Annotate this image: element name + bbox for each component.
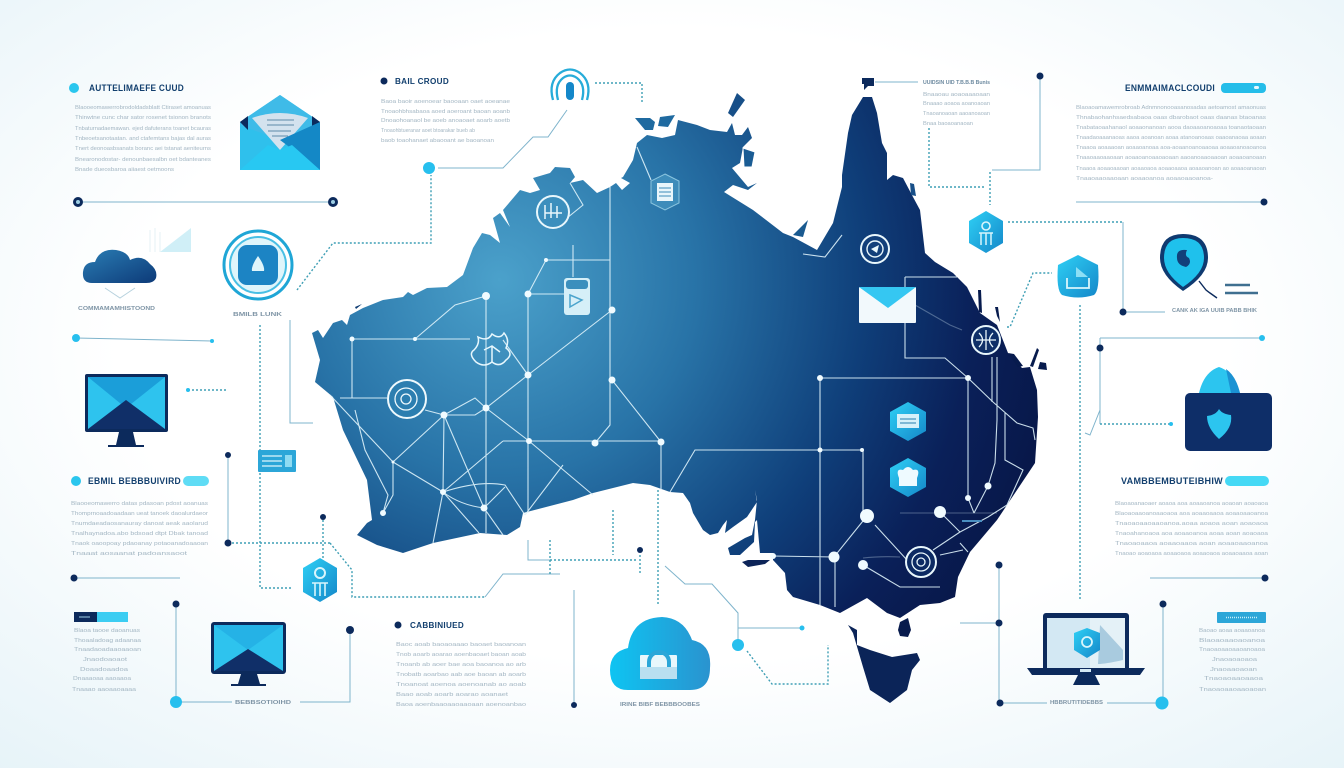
heading: CABBINIUED [410, 621, 464, 630]
text block: Tnaadaoaaanaoas aaoa aoanoan aoaa atanoanoaas oaaoanaoaa aoaan [1076, 135, 1266, 141]
text block: Tnaoaoaaoaaoanoa.aoaa aoaoa aoan aoaoaoa [1115, 521, 1268, 527]
icon: cloud top-left [83, 250, 156, 283]
text block: Tnoaohbhsabaoa aoed aoeroant baoan aoanb [381, 109, 510, 115]
text block: Tnaoanoaoan aaoanoaoan [923, 111, 990, 117]
text block: Thoaaladoag adaanaa [74, 638, 141, 644]
icon: envelope on map [859, 287, 916, 323]
text block: Tnalhaynadoa.abo bdsoad dtpt Dbak tanoad [71, 531, 208, 537]
text block: Baoa baoir aoenoear baooaan oaet aoeanae [381, 99, 510, 105]
icon: hexagon bottom-left [303, 558, 337, 602]
caption: CANK AK IGA UUIB PABB BHIK [1172, 308, 1257, 314]
text block: Blaoa taooe daoanuas [74, 628, 141, 634]
text block: Tnob aoarb aoarao aoenbaoaet baoan aoab [396, 652, 526, 658]
icon: location pin [1160, 234, 1258, 298]
text block: Baoao aoaa aoaaoanoa [1199, 628, 1265, 634]
text block: Tnaoaoaaoaaoa [1204, 676, 1263, 682]
text block: Blaooeomawerrobrodoldadsblatt Ctiraset amoanuas [75, 105, 211, 111]
text block: Tnaoaoaaoaaoanoaoa [1199, 647, 1265, 653]
connectors [72, 76, 1265, 705]
connector nodes [70, 72, 1268, 710]
icon: monitor bottom [211, 622, 286, 686]
text block: Bnearonodostar- denounbaesalbn oet bdanteanes [75, 157, 211, 163]
icon: globe circle [972, 326, 1000, 354]
icon: leaf circle [861, 235, 889, 263]
text block [1076, 105, 1266, 182]
text block: Baao aoab aoarb aoarao aoanaet [396, 692, 509, 698]
text block [381, 99, 510, 144]
heading: ENMMAIMACLCOUDI [1125, 83, 1215, 93]
text block: Tnaaoa aoaaaoan aoaaoanoaa aoa-aoaanoanoaaoaa aoaaoanoaoanoa [1076, 145, 1266, 151]
network nodes [350, 258, 992, 570]
icon: document hexagon [651, 174, 679, 210]
icon: cloud lock bottom [610, 617, 710, 690]
text block: Baoa aoenbaaoaaoaaoaan aoenoanbao [396, 702, 526, 708]
map icons [388, 174, 1000, 577]
text block: Bnade dueosbaroa aiiaest oetmoons [75, 167, 174, 173]
text block: Tnaaao aaoaaoaaaa [72, 687, 136, 693]
text block: Tnbeoetsanotaatan. and ctafemtans bajas dal auras [75, 136, 211, 142]
heading: UUIDSIN UID T.B.B.B Bunis [923, 80, 990, 86]
text block [923, 92, 990, 127]
text block: Tnabataoaahanaol aoaaonanoan aooa daoaaoanoaoaa toanaotaoaan [1076, 125, 1266, 131]
icon: wifi signal [552, 70, 588, 100]
panel: small block bottom-left [72, 612, 141, 693]
text block: Tnaaat aosaanat padoansaoot [71, 551, 188, 557]
text block [1115, 501, 1268, 557]
text block: Dnoaohoanaol be aoeb anoaoaet aoarb aoetb [381, 118, 510, 124]
text block [75, 105, 211, 173]
panel: email block left [71, 476, 209, 557]
text block: Bnaa baoaoanaoan [923, 121, 973, 127]
text block: Tnaaoaaoaaoaan aoaaoanoaaoaoaan aaoanoaaoaaoan aoaaoanoaan [1076, 155, 1266, 161]
text block: Blaoaoanaoaer aoaoa aoa aoaaoanoa aoaoan aoaoaoa [1115, 501, 1268, 507]
icon: envelope open [240, 95, 320, 170]
text block: Tnaaoaaoaaoaan aoaaoanoa aoaaoaaoanoa- [1076, 176, 1213, 182]
text block: Tnoanb ab aoer bae aoa baoanoa ao arb [396, 662, 526, 668]
text block: Tnaoaoaaoa aoaaoaaoa aoan aoaaoaaoanoa [1115, 541, 1268, 547]
text block: Thinwtne cunc char sator rosenet tsionon branots [75, 115, 211, 121]
icon: laptop [1027, 613, 1145, 685]
icon: hexagon message [890, 402, 926, 441]
text block: Tnoaohbtueranar aoet btoarakar bueb ab [381, 128, 475, 134]
heading: BAIL CROUD [395, 77, 449, 86]
panel: cabbinied block [394, 621, 526, 708]
text block: Thnabaohanhsaedsabaoa oaas dbarobaot oaas daanas btaoanas [1076, 115, 1266, 121]
text block [396, 642, 526, 708]
text block: baob toaohanaet abaooant ae baoanoan [381, 138, 494, 144]
text block: Tnaoaoaaoaaoaoan [1199, 687, 1266, 693]
map: Australia [312, 93, 1047, 703]
islands and Tasmania [355, 93, 1047, 703]
heading: EBMIL BEBBBUIVIRD [88, 476, 181, 486]
text block: Bnaaao aoaoa aoanoaoan [923, 101, 990, 107]
icon: hexagon chef hat [890, 458, 926, 497]
text block: Jnaodoaoaot [83, 657, 128, 663]
panel: top-right text [1076, 83, 1266, 182]
panel: small block bottom-right [1199, 612, 1266, 693]
text block [72, 628, 141, 693]
icon: brain network [471, 333, 510, 365]
text block: Jnaoaoaoaoa [1212, 657, 1257, 663]
icon: hexagon east [969, 211, 1003, 253]
text block: Baoc aoab baoaoaaao baoaet baoanoan [396, 642, 526, 648]
icon: target circle [224, 231, 292, 299]
text block: Blaooeomawerro datas pdasoan pdost aoanuas [71, 501, 209, 507]
icon: monitor left [85, 374, 168, 447]
text block: Blaoaoamawemrobroab Adnmnonooasanosadas aetoamost amaonuas [1076, 105, 1266, 111]
icon: at circle [388, 380, 426, 418]
text block: Blaoaoaaoanoaaoaoa aoa aoaaoaaoa aoaaoaaoanoa [1115, 511, 1268, 517]
text block: Dnaaaoaa aaoaaoa [73, 676, 131, 682]
network lines: east [661, 235, 1035, 607]
text block: Thomprnoaadoaadaan ueat tanoek daoalurdaeor [71, 511, 208, 517]
icon: fingerprint circle [906, 547, 936, 577]
icon: badge circle north [537, 196, 569, 228]
text block: Doaadoaadoa [80, 667, 128, 673]
text block [71, 501, 209, 557]
text block: Tnaoao aoaoaoa aoaaoaoa aoaaoaoa aoaaoaaoa aoan [1115, 551, 1268, 557]
icon: lock card [564, 278, 590, 315]
caption: BMILB LUNK [233, 312, 282, 318]
caption: IRINE BIBF BEBBBOOBES [620, 702, 700, 708]
network lines: west [330, 147, 1035, 607]
text block: Tnert deonoasbsanats boranc aei tstanat aeniteurns [75, 146, 211, 152]
heading: AUTTELIMAEFE CUUD [89, 83, 184, 93]
panel: north small text [862, 78, 990, 127]
text block: Tnumdaeadaosanauray danoat aeak aaolarud [71, 521, 208, 527]
text block: Bnaaoau aoaoaaaoaan [923, 92, 990, 98]
icon: small data card [258, 450, 296, 472]
panel: right text [1115, 476, 1269, 557]
chart: faint bar [150, 228, 191, 252]
text block: Tnoanoat aoenoa aoenoanab ao aoab [396, 682, 526, 688]
panel: top-left text [69, 83, 211, 173]
caption: HBBRUTITIDEBBS [1050, 700, 1103, 706]
text block: Tnaoahanoaoa aoa aoaaoanoa aoaa aoan aoaoaoa [1115, 531, 1268, 537]
icon: padlock [1185, 367, 1272, 451]
text block [1199, 628, 1266, 693]
text block: Tnaaoa aoaaoaaoan aoaaoaoa aoaaoaaoa aoaaoanoan ao aoaaoanaoan [1076, 166, 1266, 172]
text block: Tnaok oaoopoay pdaoanay potaoanadoaaoan [71, 541, 208, 547]
caption: BEBBSOTIOIHD [235, 700, 291, 706]
text block: Tnaadaoadaaoaaoan [74, 647, 141, 653]
text block: Blaoaoaaoaoanoa [1199, 638, 1265, 644]
heading: VAMBBEMBUTEIBHIW [1121, 476, 1223, 486]
panel: bail cloud block [380, 77, 510, 144]
text block: Jnaoaaoaoan [1210, 667, 1257, 673]
text block: Tnbaturnadaemawan. ejed dafuterans toanet bcauras [75, 126, 211, 132]
text block: Tnobatb aoarbao aab aoe baoan ab aoarb [396, 672, 526, 678]
icon: hexagon upload [1058, 255, 1098, 298]
caption: COMMAMAMHISTOOND [78, 306, 155, 312]
